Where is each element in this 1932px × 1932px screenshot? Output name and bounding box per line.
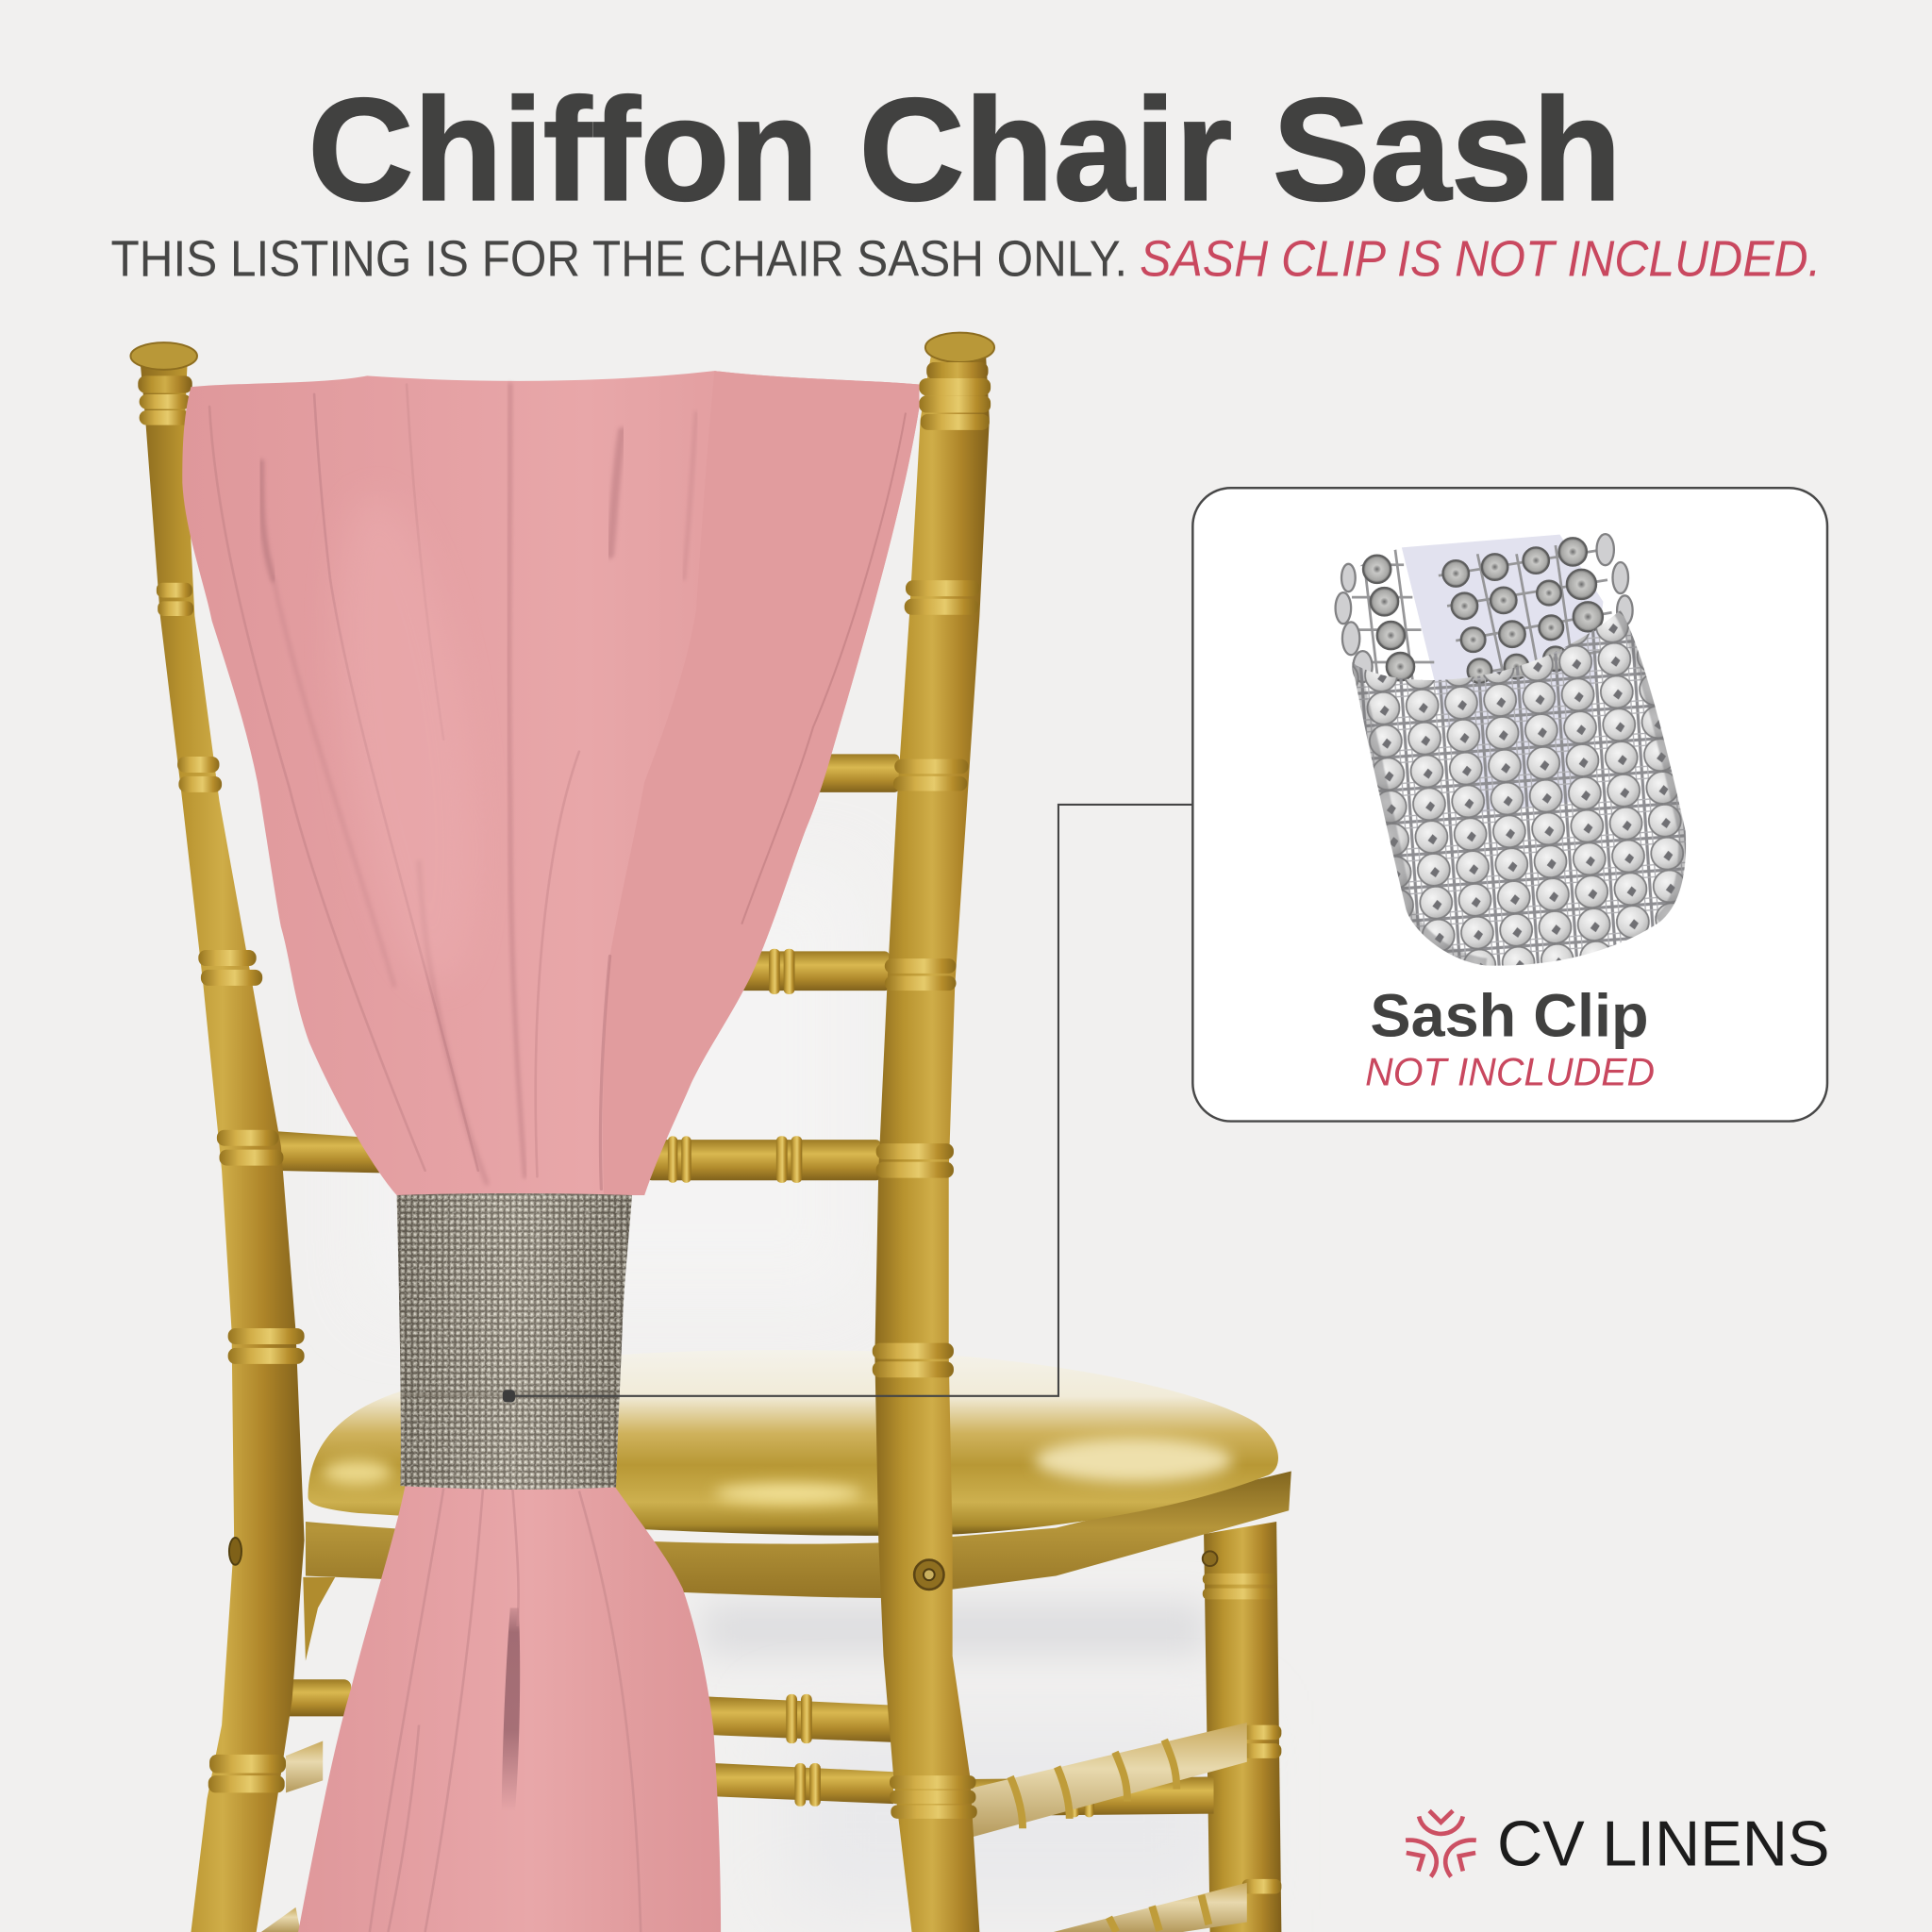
lower rails and stretchers	[261, 1679, 1247, 1932]
right post	[873, 333, 994, 1932]
soft shadows	[370, 862, 1232, 1909]
fold shadows	[209, 385, 696, 1189]
left post	[130, 342, 305, 1932]
seat frame	[306, 1472, 1291, 1598]
rhinestone sash clip on chair	[397, 1193, 632, 1490]
callout card: sash clip	[1192, 488, 1827, 1122]
wordmark: CV LINENS	[1497, 1808, 1830, 1879]
title: Chiffon Chair Sash	[308, 68, 1622, 231]
subtitle	[111, 232, 1821, 288]
seat cushion	[308, 1350, 1278, 1536]
seat frame bracket	[303, 1577, 335, 1661]
chiffon sash lower drape	[298, 1485, 721, 1932]
icon: rhinestone clip	[1336, 534, 1698, 974]
label: sash clip: Sash Clip	[1370, 981, 1649, 1049]
subtitle: SASH CLIP IS NOT INCLUDED.	[1140, 232, 1821, 288]
subtitle: THIS LISTING IS FOR THE CHAIR SASH ONLY.	[111, 232, 1127, 288]
rear leg	[1203, 1522, 1281, 1932]
leader line from chair clip to callout	[503, 805, 1192, 1402]
logo: CV Linens	[1406, 1808, 1830, 1879]
icon: logo mark	[1406, 1810, 1476, 1876]
label: not included: NOT INCLUDED	[1365, 1050, 1655, 1094]
chair photo	[130, 333, 1291, 1932]
back rails	[274, 754, 899, 1183]
chiffon sash upper drape	[182, 371, 919, 1195]
right flap	[603, 371, 919, 1195]
